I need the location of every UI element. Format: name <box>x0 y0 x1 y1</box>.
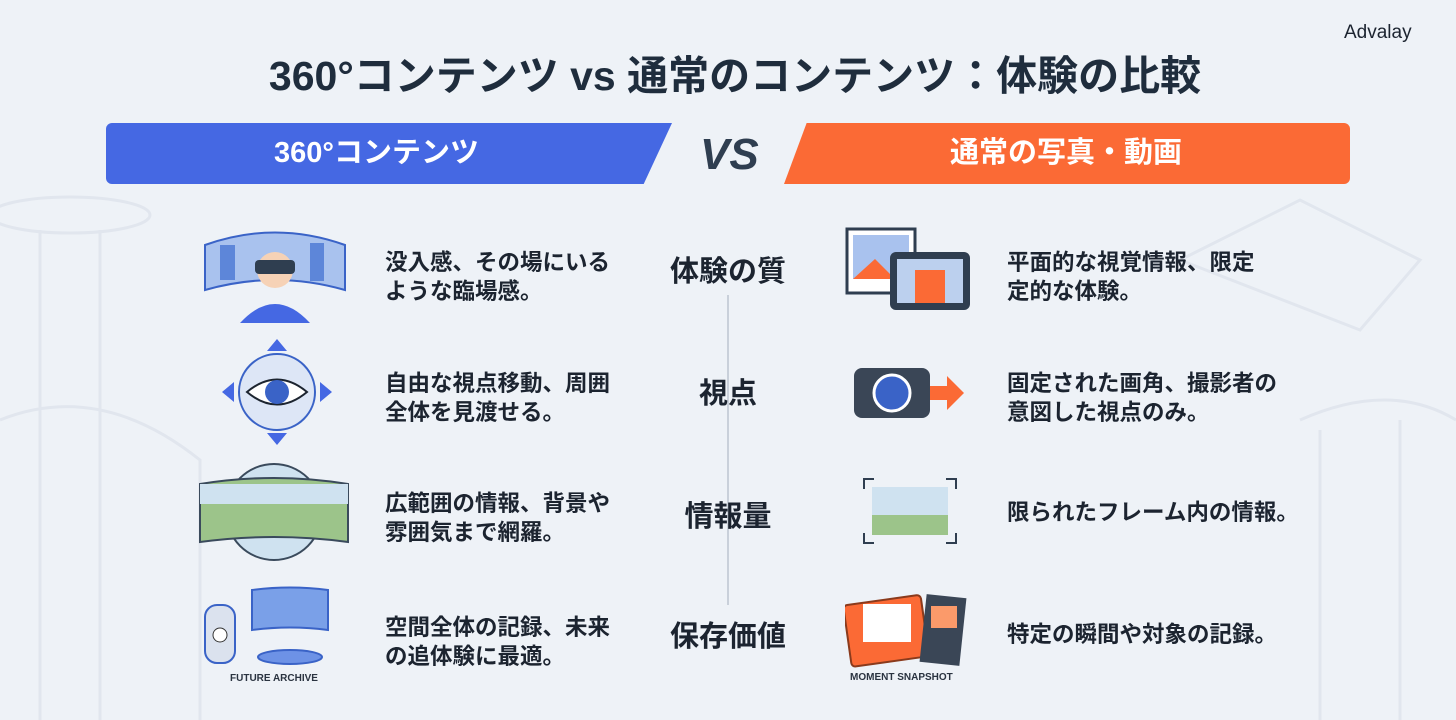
text: right rows <box>1007 250 1255 304</box>
icon: VR immersion <box>204 232 346 323</box>
vs badge: VS <box>700 130 759 179</box>
icon: framed scene <box>863 478 957 544</box>
center divider <box>727 295 729 605</box>
icon: future archive <box>204 586 329 684</box>
text: の追体験に最適。 <box>385 644 565 669</box>
banner: 360 content: 360°コンテンツ <box>274 137 479 169</box>
text: right rows: 定的な体験。 <box>1007 279 1142 304</box>
text: 自由な視点移動、周囲 <box>385 371 610 396</box>
icon: flat photo & tablet <box>846 228 970 310</box>
text: 視点 <box>699 378 757 410</box>
text: 空間全体の記録、未来 <box>385 615 610 640</box>
text: 情報量 <box>684 501 772 533</box>
text: 特定の瞬間や対象の記録。 <box>1007 622 1277 647</box>
caption: moment snapshot: MOMENT SNAPSHOT <box>850 672 953 683</box>
brand: Advalay: Advalay <box>1344 22 1412 43</box>
text: 限られたフレーム内の情報。 <box>1007 500 1299 525</box>
title: 360°コンテンツ vs 通常のコンテンツ：体験の比較 <box>269 53 1201 99</box>
text: 全体を見渡せる。 <box>385 400 565 425</box>
text: left rows: 没入感、その場にいる <box>385 250 610 275</box>
banner: normal photo/video <box>784 123 1350 184</box>
icon: eye arrows <box>222 339 332 445</box>
text: right rows: 平面的な視覚情報、限定 <box>1007 250 1255 275</box>
caption: future archive: FUTURE ARCHIVE <box>230 673 318 684</box>
center labels: 体験の質 <box>670 256 786 288</box>
text: left rows: ような臨場感。 <box>385 279 543 304</box>
text: 意図した視点のみ。 <box>1007 400 1210 425</box>
banner: normal photo/video: 通常の写真・動画 <box>950 137 1182 169</box>
text: 固定された画角、撮影者の <box>1007 371 1277 396</box>
banner: 360 content <box>106 123 672 184</box>
icon: moment snapshot <box>845 594 966 683</box>
text: 保存価値 <box>670 621 786 653</box>
text: 広範囲の情報、背景や <box>385 491 610 516</box>
text: left rows <box>385 250 610 304</box>
text: 雰囲気まで網羅。 <box>385 520 565 545</box>
icon: panorama <box>199 463 349 561</box>
icon: camera <box>854 368 964 418</box>
